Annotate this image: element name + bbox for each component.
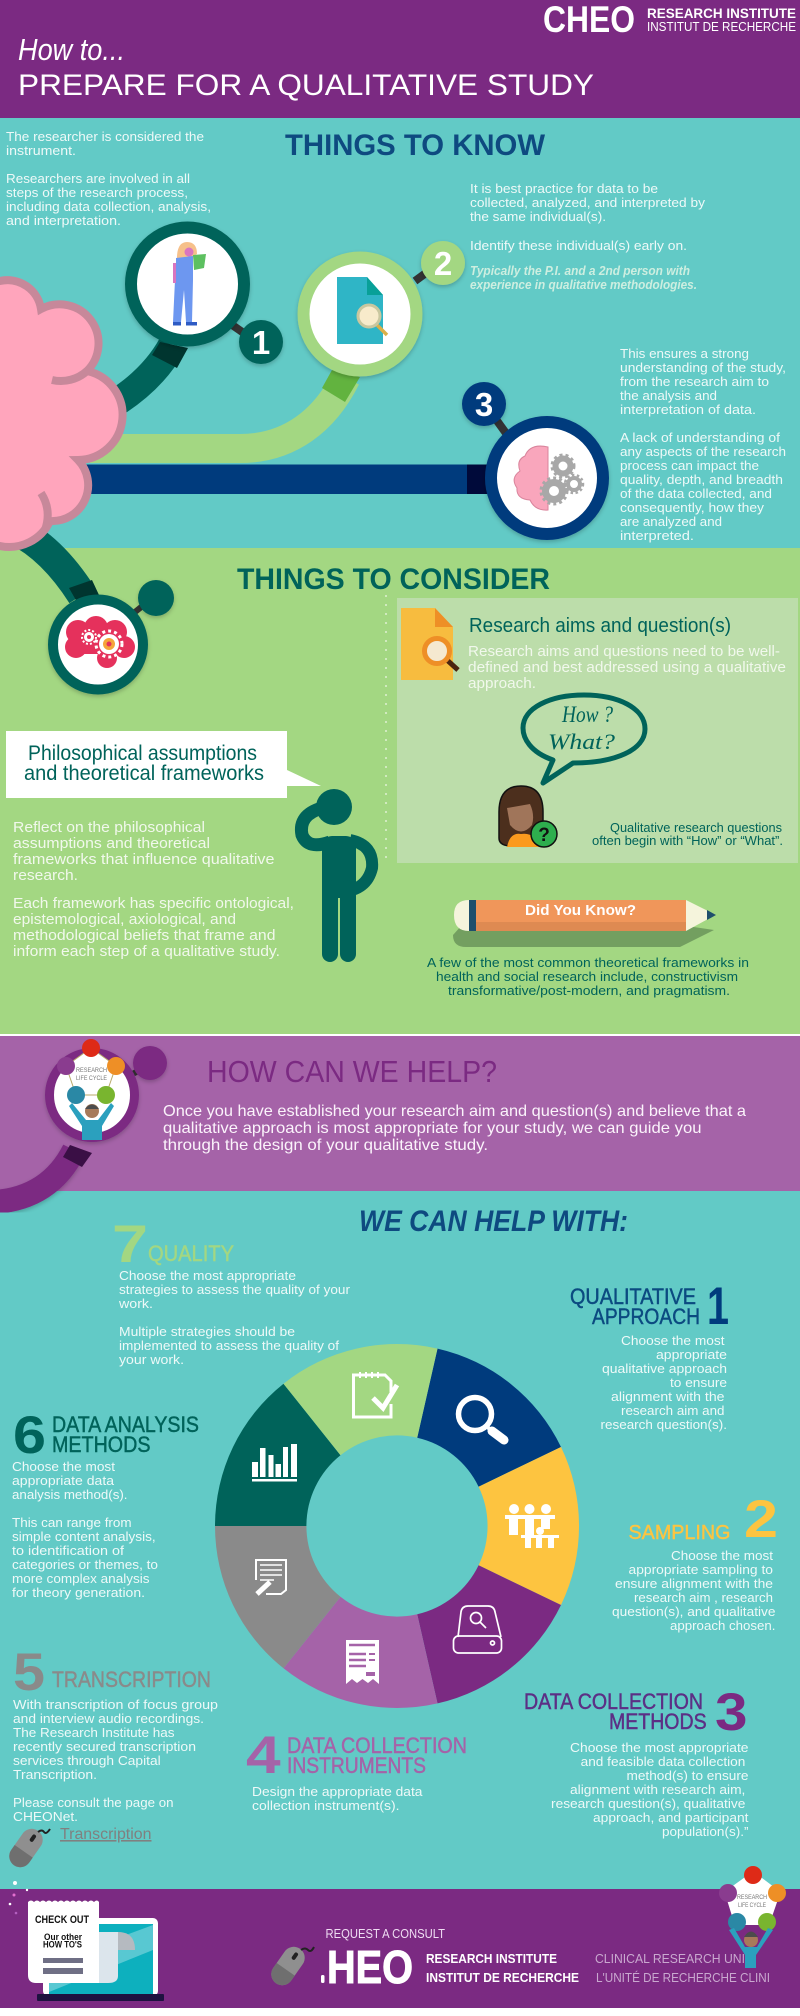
text block: same individuals: the same individual(s). — [470, 209, 606, 224]
text block: data collection methods: Choose the most appropriate — [570, 1740, 748, 1755]
text block: same individuals: Typically the P.I. and a 2nd person with — [470, 263, 690, 278]
text block: data collection instruments: Design the appropriate data — [252, 1784, 423, 1799]
text block: strong understanding: quality, depth, and breadth — [620, 472, 783, 487]
arrow: handle to circle 2 — [90, 370, 360, 448]
text block: sampling: approach chosen. — [670, 1618, 776, 1633]
icon: thinking figure — [301, 789, 372, 962]
text block: strong understanding: This ensures a strong — [620, 346, 749, 361]
text block: qualitative approach: Choose the most — [621, 1333, 725, 1348]
icon: speech bubble — [523, 695, 645, 783]
text block: transcription: The Research Institute has — [13, 1725, 175, 1740]
icon: research life cycle figure: RESEARCH — [737, 1895, 767, 1901]
text: research institute: INSTITUT DE RECHERCHE — [426, 1970, 579, 1985]
icon: girl with question mark: ? — [538, 825, 550, 846]
item 6: data analysis methods: DATA ANALYSIS — [52, 1412, 199, 1437]
text block: strong understanding — [620, 346, 786, 543]
text block: researcher as instrument: including data collection, analysis, — [6, 199, 211, 214]
heading: things to consider: THINGS TO CONSIDER — [237, 563, 550, 596]
circle 3: brain and gears — [491, 422, 603, 534]
text block: data collection methods: alignment with research aim, — [570, 1782, 745, 1797]
item 3: data collection methods — [524, 1683, 749, 1839]
text block: data analysis: for theory generation. — [12, 1585, 145, 1600]
circle 2: document search — [304, 258, 416, 370]
item 3: data collection methods: DATA COLLECTION — [524, 1689, 703, 1714]
heading: research aims: Research aims and question(s) — [469, 615, 731, 637]
callout: philosophical assumptions — [6, 731, 321, 798]
panel: header — [0, 0, 800, 118]
icon: research life cycle bubbles: LIFE CYCLE — [76, 1076, 107, 1082]
text block: data collection instruments: collection instrument(s). — [252, 1798, 400, 1813]
arrow: handle to circle 4 — [15, 530, 99, 602]
text block: philosophical frameworks — [13, 819, 294, 960]
icon: laptop with check out note: HOW TO'S — [43, 1940, 82, 1950]
logo: HEO: HEO — [327, 1941, 413, 1993]
panel: things to consider — [0, 548, 800, 1034]
title — [18, 32, 594, 102]
text block: data analysis — [12, 1459, 158, 1600]
text block: research aims: approach. — [468, 675, 536, 692]
segment: qualitative approach — [417, 1349, 561, 1487]
text block: theoretical frameworks: health and social research include, constructivism — [436, 969, 738, 984]
text block: transcription: Transcription. — [13, 1767, 97, 1782]
text block: philosophical frameworks: frameworks that influence qualitative — [13, 851, 274, 868]
text block: quality: work. — [118, 1296, 153, 1311]
text block: guidance — [163, 1103, 746, 1154]
text block: philosophical frameworks: epistemological, axiological, and — [13, 911, 236, 928]
segment: data collection instruments — [284, 1597, 438, 1708]
text block: data analysis: This can range from — [12, 1515, 132, 1530]
text block: research aims: defined and best addressed using a qualitative — [468, 659, 786, 676]
text block: same individuals: collected, analyzed, and interpreted by — [470, 195, 706, 210]
number badge 3 — [462, 382, 508, 436]
icon: research life cycle figure: LIFE CYCLE — [738, 1903, 766, 1909]
text block: theoretical frameworks: A few of the most common theoretical frameworks in — [427, 955, 749, 970]
item 7: quality: 7 — [112, 1215, 148, 1274]
text block: transcription: recently secured transcription — [13, 1739, 196, 1754]
callout: philosophical assumptions: and theoretical frameworks — [24, 762, 264, 785]
text block: researcher as instrument — [6, 129, 211, 228]
icon: did you know pencil: Did You Know? — [525, 902, 636, 919]
text block: philosophical frameworks: inform each step of a qualitative study. — [13, 943, 280, 960]
logo: CHEO Research Institute: RESEARCH INSTITUTE — [647, 5, 796, 21]
panel: things to know — [0, 118, 800, 548]
icon: yellow document with magnifier — [401, 608, 458, 680]
logo: CHEO Research Institute: CHEO — [543, 0, 635, 40]
text block: how or what — [592, 820, 783, 848]
item 4: data collection instruments: INSTRUMENTS — [287, 1753, 426, 1778]
panel: research aims and questions — [397, 598, 798, 863]
text block: philosophical frameworks: Reflect on the philosophical — [13, 819, 205, 836]
text block: strong understanding: are analyzed and — [620, 514, 722, 529]
text block: data analysis: categories or themes, to — [12, 1557, 158, 1572]
item 2: sampling — [612, 1490, 778, 1633]
dotted divider — [385, 595, 387, 865]
text block: same individuals: experience in qualitative methodologies. — [470, 277, 697, 292]
text block: strong understanding: interpretation of data. — [620, 402, 756, 417]
icon: half brain with gears — [514, 446, 583, 510]
item 6: data analysis methods — [12, 1406, 199, 1600]
text block: data collection methods: approach, and participant — [593, 1810, 749, 1825]
badge: circle 4 small dot — [135, 580, 174, 616]
text block: philosophical frameworks: research. — [13, 867, 78, 884]
text block: sampling — [612, 1548, 776, 1633]
text block: data analysis: simple content analysis, — [12, 1529, 156, 1544]
text block: qualitative approach: research aim and — [621, 1403, 724, 1418]
icon: research life cycle bubbles: RESEARCH — [76, 1068, 107, 1074]
text: research institute — [426, 1951, 579, 1985]
icon: document and pencil — [256, 1560, 286, 1594]
text block: sampling: Choose the most — [671, 1548, 773, 1563]
icon: checklist — [354, 1372, 397, 1417]
text block: same individuals — [470, 181, 706, 292]
arrow: handle to circle 3 — [80, 464, 490, 494]
text block: data collection methods: and feasible data collection — [581, 1754, 745, 1769]
text block: sampling: question(s), and qualitative — [612, 1604, 776, 1619]
item 2: sampling: 2 — [744, 1490, 778, 1549]
text block: strong understanding: from the research aim to — [620, 374, 769, 389]
panel: footer — [0, 1866, 800, 2008]
text block: data analysis: analysis method(s). — [12, 1487, 128, 1502]
text block: data collection methods: population(s).” — [662, 1824, 748, 1839]
icon: research life cycle figure — [719, 1866, 786, 1968]
text block: researcher as instrument: steps of the research process, — [6, 185, 188, 200]
text block: researcher as instrument: Researchers are involved in all — [6, 171, 190, 186]
item 1: qualitative approach — [570, 1277, 729, 1432]
title: PREPARE FOR A QUALITATIVE STUDY — [18, 69, 594, 102]
heading: we can help with: WE CAN HELP WITH: — [359, 1205, 628, 1238]
text block: quality — [118, 1268, 351, 1367]
icon: laptop with check out note: Our other — [44, 1932, 82, 1943]
panel: we can help with — [0, 1191, 800, 1889]
number badge 2 — [415, 241, 465, 285]
item 3: data collection methods: 3 — [715, 1683, 748, 1742]
circle 4: thinking brain — [53, 600, 143, 690]
donut chart — [215, 1344, 579, 1708]
text block: data analysis: more complex analysis — [12, 1571, 150, 1586]
icon: girl with question mark — [499, 786, 557, 847]
text block: research aims — [468, 643, 786, 692]
text block: theoretical frameworks: transformative/post-modern, and pragmatism. — [448, 983, 730, 998]
text block: guidance: through the design of your qualitative study. — [163, 1137, 488, 1154]
text block: quality: Multiple strategies should be — [119, 1324, 295, 1339]
text: clinical research unit — [595, 1951, 770, 1985]
text block: data collection methods: method(s) to ensure — [626, 1768, 748, 1783]
text block: transcription — [13, 1697, 218, 1824]
number badge 3: 3 — [475, 386, 493, 423]
text block: strong understanding: understanding of the study, — [620, 360, 786, 375]
logo: CHEO Research Institute — [543, 0, 796, 40]
text block: how or what: Qualitative research questions — [610, 820, 782, 835]
title: How to... — [18, 32, 125, 67]
segment: sampling — [479, 1447, 579, 1605]
badge: purple dot — [125, 1046, 167, 1080]
segment: data collection methods — [417, 1565, 561, 1703]
text block: philosophical frameworks: assumptions and theoretical — [13, 835, 210, 852]
icon: computer mouse in footer — [267, 1942, 314, 1990]
icon: family — [505, 1504, 559, 1548]
number badge 1: 1 — [252, 324, 270, 361]
text block: strong understanding: interpreted. — [620, 528, 694, 543]
sparkles — [9, 1881, 28, 1914]
item 5: transcription: 5 — [13, 1643, 45, 1702]
item 6: data analysis methods: 6 — [13, 1406, 46, 1465]
icon: receipt — [346, 1640, 379, 1684]
text block: data analysis: Choose the most — [12, 1459, 115, 1474]
segment: quality — [284, 1344, 438, 1455]
text block: researcher as instrument: instrument. — [6, 143, 76, 158]
icon: document with magnifier — [337, 277, 387, 344]
text block: how or what: often begin with “How” or “What”. — [592, 833, 783, 848]
text block: transcription: With transcription of focus group — [13, 1697, 218, 1712]
text block: transcription: CHEONet. — [13, 1809, 78, 1824]
segment: transcription — [215, 1526, 340, 1668]
link: transcription: Transcription — [60, 1826, 152, 1843]
text block: data collection instruments — [252, 1784, 423, 1813]
number badge 1 — [225, 320, 283, 364]
item 2: sampling: SAMPLING — [628, 1522, 730, 1544]
arrow: handle to circle 1 — [100, 342, 188, 412]
callout: philosophical assumptions: Philosophical assumptions — [28, 742, 257, 765]
text block: research aims: Research aims and questions need to be well- — [468, 643, 780, 660]
item 3: data collection methods: METHODS — [609, 1709, 707, 1734]
icon: laptop with check out note — [28, 1900, 164, 2001]
text: clinical research unit: L'UNITÉ DE RECHERCHE CLINI — [596, 1970, 770, 1985]
text block: strong understanding: the analysis and — [620, 388, 717, 403]
number badge 2: 2 — [434, 245, 452, 282]
text block: strong understanding: A lack of understanding of — [620, 430, 780, 445]
item 4: data collection instruments — [246, 1726, 467, 1813]
text block: qualitative approach: to ensure — [670, 1375, 727, 1390]
text block: researcher as instrument: and interpretation. — [6, 213, 121, 228]
text block: qualitative approach: alignment with the — [611, 1389, 724, 1404]
text block: strong understanding: process can impact the — [620, 458, 759, 473]
text block: philosophical frameworks: Each framework has specific ontological, — [13, 895, 294, 912]
text block: strong understanding: of the data collected, and — [620, 486, 772, 501]
text: request a consult: REQUEST A CONSULT — [326, 1926, 445, 1941]
icon: brain — [0, 280, 123, 547]
text block: transcription: and interview audio recordings. — [13, 1711, 204, 1726]
text block: strong understanding: consequently, how they — [620, 500, 765, 515]
text block: same individuals: It is best practice for data to be — [470, 181, 658, 196]
item 1: qualitative approach: 1 — [707, 1277, 729, 1336]
text block: transcription: services through Capital — [13, 1753, 161, 1768]
icon: bar chart — [252, 1444, 297, 1482]
heading: how can we help: HOW CAN WE HELP? — [207, 1054, 497, 1089]
item 6: data analysis methods: METHODS — [52, 1432, 150, 1457]
icon: hard drive search — [454, 1606, 502, 1653]
item 4: data collection instruments: DATA COLLECTION — [287, 1733, 467, 1758]
item 4: data collection instruments: 4 — [246, 1726, 281, 1785]
text block: same individuals: Identify these individual(s) early on. — [470, 238, 687, 253]
text block: qualitative approach: research question(s). — [600, 1417, 727, 1432]
icon: red brain with gears — [65, 616, 135, 668]
segment: data analysis — [215, 1384, 340, 1526]
item 5: transcription: TRANSCRIPTION — [52, 1667, 211, 1692]
icon: computer mouse — [5, 1824, 50, 1872]
text: research institute: RESEARCH INSTITUTE — [426, 1951, 557, 1966]
text block: philosophical frameworks: methodological beliefs that frame and — [13, 927, 276, 944]
item 1: qualitative approach: QUALITATIVE — [570, 1284, 696, 1309]
text block: quality: strategies to assess the quality of your — [119, 1282, 351, 1297]
heading: things to know: THINGS TO KNOW — [285, 129, 546, 162]
text block: qualitative approach — [600, 1333, 727, 1432]
item 7: quality — [112, 1215, 351, 1367]
text block: strong understanding: any aspects of the research — [620, 444, 786, 459]
text block: sampling: ensure alignment with the — [615, 1576, 773, 1591]
icon: magnifier — [458, 1398, 504, 1440]
text block: qualitative approach: qualitative approach — [602, 1361, 727, 1376]
text block: guidance: Once you have established your research aim and question(s) and believe that a — [163, 1103, 746, 1120]
text block: sampling: research aim , research — [634, 1590, 773, 1605]
text block: sampling: appropriate sampling to — [628, 1562, 773, 1577]
icon: did you know pencil — [453, 900, 716, 947]
icon: laptop with check out note: CHECK OUT — [35, 1914, 89, 1926]
text block: transcription: Please consult the page on — [13, 1795, 174, 1810]
text block: quality: implemented to assess the quality of — [119, 1338, 339, 1353]
text block: theoretical frameworks — [427, 955, 749, 998]
text block: data analysis: to identification of — [12, 1543, 124, 1558]
icon: speech bubble: What? — [548, 729, 615, 754]
text block: researcher as instrument: The researcher is considered the — [6, 129, 204, 144]
circle 1: researcher — [131, 228, 244, 340]
text block: data collection methods — [551, 1740, 749, 1839]
icon: speech bubble: How ? — [561, 702, 613, 727]
icon: nurse with clipboard — [173, 242, 206, 326]
text block: data analysis: appropriate data — [12, 1473, 115, 1488]
text block: quality: Choose the most appropriate — [119, 1268, 296, 1283]
text block: quality: your work. — [119, 1352, 184, 1367]
text block: data collection methods: research question(s), qualitative — [551, 1796, 745, 1811]
item 5: transcription — [13, 1643, 218, 1843]
item 7: quality: QUALITY — [148, 1241, 234, 1266]
text block: qualitative approach: appropriate — [656, 1347, 727, 1362]
text block: guidance: qualitative approach is most appropriate for your study, we can guide you — [163, 1120, 702, 1137]
item 1: qualitative approach: APPROACH — [592, 1304, 700, 1329]
text: clinical research unit: CLINICAL RESEARCH UNI — [595, 1951, 745, 1966]
icon: research life cycle bubbles — [57, 1039, 125, 1140]
panel: how can we help — [0, 1036, 800, 1191]
circle: research life cycle — [50, 1039, 134, 1140]
arrow: handle to research life cycle — [0, 1145, 92, 1202]
